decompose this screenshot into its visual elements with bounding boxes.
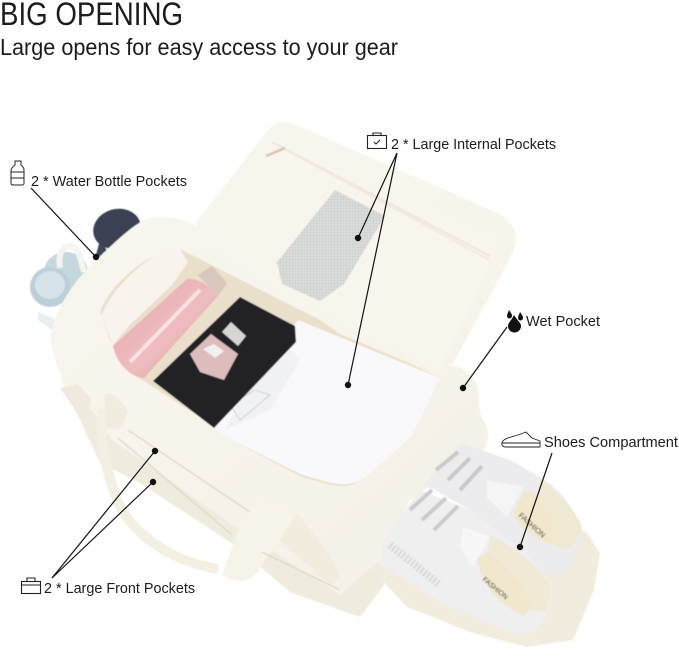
folded white t-shirt — [214, 320, 440, 484]
water bottles in side pocket — [30, 203, 145, 330]
front white sneaker — [379, 490, 551, 634]
back white sneaker: FASHION — [517, 511, 547, 540]
bag lower front shading — [64, 385, 384, 617]
label: shoes compartment: Shoes Compartment — [544, 435, 678, 451]
icon: sneaker — [502, 432, 540, 447]
leader line: water bottle pockets — [31, 188, 99, 260]
open lid — [196, 122, 516, 378]
lid zip seam — [272, 142, 490, 256]
product photo: open duffel bag — [30, 122, 600, 647]
shoe compartment flap — [378, 490, 600, 647]
label: internal pockets: 2 * Large Internal Pockets — [391, 137, 556, 153]
leader lines: internal pockets — [345, 153, 397, 388]
bag interior opening — [100, 246, 440, 486]
pink bottle — [113, 279, 218, 378]
perfume bottle — [190, 334, 238, 380]
subtitle: Large opens for easy access to your gear — [0, 34, 398, 60]
icon: suitcase with check — [368, 133, 386, 148]
front white sneaker: FASHION — [481, 576, 509, 601]
label: front pockets: 2 * Large Front Pockets — [44, 581, 195, 597]
label: wet pocket: Wet Pocket — [526, 314, 600, 330]
back white sneaker — [424, 443, 582, 575]
mesh pocket — [277, 190, 385, 301]
leader line: shoes compartment — [517, 453, 552, 550]
lid interior lining — [205, 142, 500, 372]
icon: suitcase — [21, 578, 41, 594]
handles — [102, 393, 340, 585]
side pocket pad — [60, 384, 92, 420]
white lining — [101, 246, 188, 345]
black packing pouch — [153, 297, 296, 428]
lid zip pull — [266, 148, 285, 156]
label: water bottle pockets: 2 * Water Bottle Pockets — [31, 174, 187, 190]
leader lines: front pockets — [52, 448, 158, 578]
leader line: wet pocket — [460, 327, 507, 391]
icon: water bottle — [11, 161, 24, 185]
icon: water drops — [507, 310, 523, 332]
bag body — [50, 217, 488, 617]
front pocket zip lines — [118, 430, 340, 590]
